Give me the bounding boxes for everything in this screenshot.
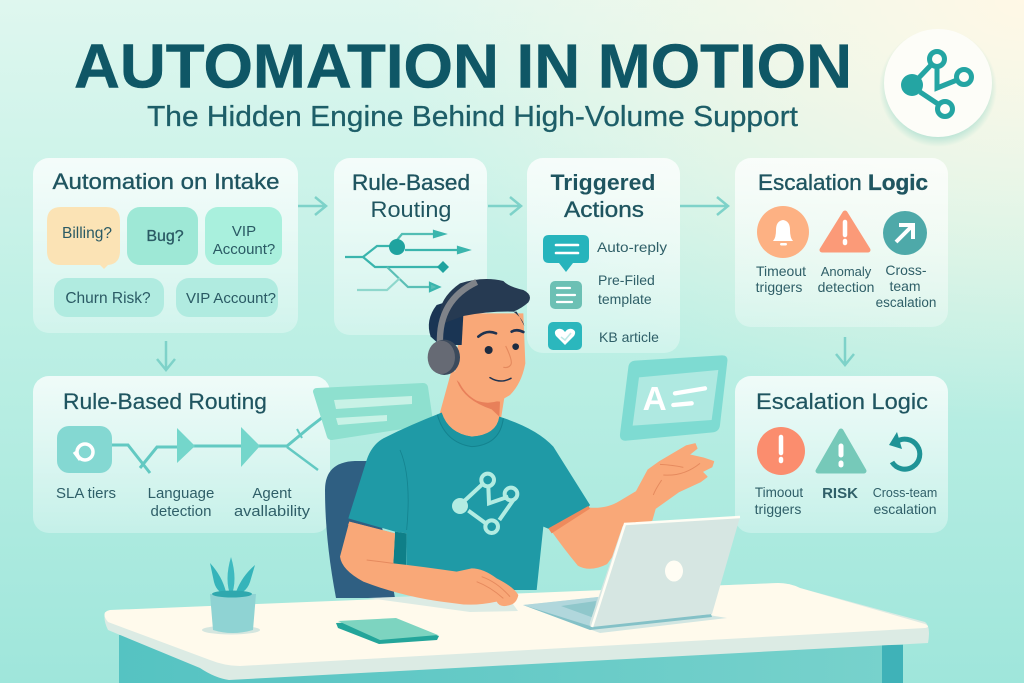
- heading: Rule-Based Routing: [63, 389, 267, 414]
- plant: [202, 557, 260, 634]
- heading: Automation on Intake: [52, 169, 280, 194]
- icon: template: [550, 281, 582, 309]
- labels: [756, 262, 936, 310]
- headphone cup: [428, 340, 460, 375]
- person: left arm and hand: [340, 522, 518, 606]
- heading: Triggered: [550, 170, 656, 195]
- bubble: vip account: VIP: [232, 223, 256, 240]
- chair: [325, 461, 395, 598]
- desk top: [104, 583, 929, 680]
- floating card: left: [313, 383, 433, 440]
- label: Auto-reply: [597, 239, 667, 255]
- eyebrows: [478, 330, 523, 337]
- bubble: vip account 2: [176, 278, 278, 317]
- arrow: routing to actions: [488, 197, 521, 215]
- labels: team: [889, 278, 921, 294]
- arrow: escalation down: [836, 337, 854, 365]
- face: [455, 313, 525, 403]
- labels: avallability: [234, 503, 311, 520]
- icon: risk triangle: [818, 431, 864, 471]
- desk legs: [119, 635, 903, 683]
- labels: Timoout: [755, 485, 803, 500]
- bubble: churn risk: [54, 278, 164, 317]
- floating card: letter A: [620, 355, 727, 441]
- right arm: [552, 444, 713, 568]
- hair: [440, 279, 530, 326]
- nose and mouth: [503, 346, 511, 368]
- heading: Escalation Logic: [756, 389, 928, 414]
- icon: rotate arrow: [889, 432, 920, 469]
- headphone band: [440, 282, 477, 344]
- bubble: bug: Bug?: [146, 228, 184, 245]
- laptop: [523, 517, 740, 633]
- bubble: bug: [127, 207, 198, 265]
- icon: warning triangle: [822, 213, 868, 250]
- labels: escalation: [873, 501, 937, 517]
- labels: Agent: [252, 485, 292, 502]
- shirt logo: [452, 474, 517, 533]
- labels: escalation: [876, 295, 936, 310]
- label: template: [598, 291, 652, 307]
- icon: sla tiers: [57, 426, 112, 473]
- person: head: [428, 279, 530, 403]
- bubble: churn risk: Churn Risk?: [65, 290, 151, 307]
- labels: triggers: [755, 501, 801, 517]
- heading: [550, 170, 656, 222]
- forearm shadow: [368, 596, 518, 612]
- labels: triggers: [756, 279, 802, 295]
- panel: rule-based routing bottom: [33, 376, 332, 533]
- hair back: [429, 297, 463, 345]
- bubble: vip account: [205, 207, 282, 265]
- arrow: intake to routing: [298, 197, 326, 215]
- labels: SLA tiers: [56, 485, 116, 502]
- labels: [56, 485, 311, 520]
- icon: network logo badge: [879, 29, 997, 147]
- label: KB article: [599, 329, 659, 345]
- icon: alert circle: [757, 427, 805, 475]
- panel: automation on intake: [33, 158, 298, 333]
- labels: Cross-team: [873, 486, 937, 500]
- arrow: actions to escalation: [680, 197, 728, 215]
- bubble: vip account 2: VIP Account?: [186, 290, 276, 307]
- heading: Routing: [370, 197, 452, 222]
- eyes: [485, 346, 493, 354]
- laptop lid: [590, 517, 740, 627]
- arrow: intake down: [157, 341, 175, 370]
- tablet: [336, 618, 439, 644]
- icon: bell: [757, 206, 809, 258]
- labels: RISK: [822, 485, 858, 502]
- panel: triggered actions: [527, 158, 680, 353]
- icon: kb article: [548, 322, 582, 350]
- heading: Actions: [564, 197, 644, 222]
- panel: rule-based routing top: [334, 158, 487, 335]
- neck: [439, 370, 505, 442]
- label: [598, 272, 655, 307]
- panel: escalation logic bottom: [735, 376, 948, 533]
- subtitle: The Hidden Engine Behind High-Volume Support: [147, 101, 798, 133]
- floating card: letter A: A: [643, 381, 667, 418]
- panel: escalation logic top: [735, 158, 948, 327]
- labels: detection: [818, 279, 874, 295]
- branching diagram: [345, 231, 468, 291]
- heading: [352, 170, 470, 222]
- labels: Language: [148, 485, 214, 502]
- bubble: billing: [47, 207, 120, 269]
- title: AUTOMATION IN MOTION: [74, 32, 852, 102]
- icon: auto-reply: [543, 235, 589, 272]
- labels: Anomaly: [821, 264, 872, 279]
- heading: Escalation Logic: [758, 170, 928, 195]
- labels: Timeout: [756, 263, 806, 279]
- bubble: billing: Billing?: [62, 225, 112, 242]
- labels: [755, 485, 937, 517]
- heading: Rule-Based: [352, 170, 470, 195]
- labels: detection: [151, 503, 211, 520]
- icon: arrow circle: [883, 211, 927, 255]
- label: Pre-Filed: [598, 272, 655, 288]
- routing flow: [112, 410, 332, 473]
- labels: Cross-: [885, 262, 927, 278]
- bubble: vip account: Account?: [213, 241, 275, 258]
- desk: [104, 583, 929, 683]
- person: torso and right arm: [348, 370, 713, 590]
- t-shirt: [348, 413, 590, 590]
